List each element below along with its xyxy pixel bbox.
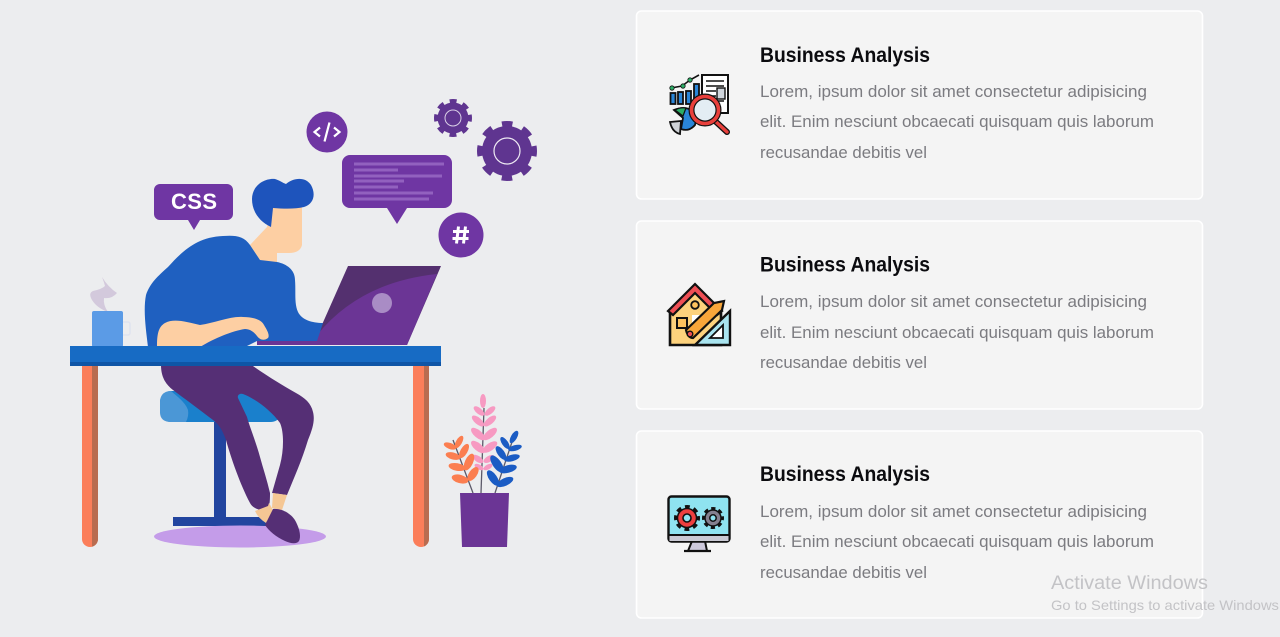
text block: Lorem, ipsum dolor sit amet consectetur adipisicing xyxy=(760,292,1147,311)
icon: monitor with gears xyxy=(668,496,730,551)
stool xyxy=(160,391,282,526)
text block: recusandae debitis vel xyxy=(760,353,927,372)
desk leg right xyxy=(413,366,429,547)
watermark: activate windows: Activate Windows xyxy=(1051,573,1208,594)
watermark: activate windows: Go to Settings to activate Windows. xyxy=(1051,597,1280,613)
text block: Lorem, ipsum dolor sit amet consectetur adipisicing xyxy=(760,82,1147,101)
icon: small gear xyxy=(437,102,469,134)
torso and sleeve xyxy=(145,236,323,347)
text block: elit. Enim nesciunt obcaecati quisquam quis laborum xyxy=(760,112,1154,131)
steam xyxy=(90,277,117,312)
text block: recusandae debitis vel xyxy=(760,563,927,582)
heading: Business Analysis xyxy=(760,463,930,486)
icon: hash circle xyxy=(438,212,484,258)
head and neck xyxy=(250,205,302,263)
panel: card 3 xyxy=(636,431,1202,618)
arm skin xyxy=(157,317,269,347)
speech bubble: code lines xyxy=(342,155,452,224)
text block xyxy=(760,502,1154,582)
watermark: activate windows xyxy=(1051,573,1280,613)
panel: card 1 xyxy=(636,11,1202,199)
speech bubble: CSS: CSS xyxy=(171,189,217,214)
hair xyxy=(252,179,314,227)
heading: Business Analysis xyxy=(760,254,930,276)
icon: analysis chart and magnifier xyxy=(670,75,728,134)
desk leg left xyxy=(82,366,98,547)
text block: elit. Enim nesciunt obcaecati quisquam quis laborum xyxy=(760,532,1154,551)
text block: recusandae debitis vel xyxy=(760,143,927,162)
text block: Lorem, ipsum dolor sit amet consectetur adipisicing xyxy=(760,502,1147,521)
trousers xyxy=(161,365,314,510)
text block xyxy=(760,82,1154,162)
potted plant xyxy=(443,394,522,547)
icon: large gear xyxy=(481,125,533,177)
ankles xyxy=(255,493,287,523)
shoe xyxy=(265,509,300,543)
illustration: developer at desk xyxy=(70,102,533,548)
icon: code tag circle xyxy=(306,112,348,152)
panel: card 2 xyxy=(636,221,1202,409)
text block xyxy=(760,292,1154,372)
floor shadow xyxy=(154,526,326,548)
text block: elit. Enim nesciunt obcaecati quisquam quis laborum xyxy=(760,323,1154,342)
laptop xyxy=(257,266,441,345)
speech bubble: CSS xyxy=(154,184,233,230)
icon: house and drafting tools xyxy=(668,284,730,345)
desk xyxy=(70,346,441,366)
coffee mug xyxy=(92,311,130,347)
heading: Business Analysis xyxy=(760,44,930,67)
